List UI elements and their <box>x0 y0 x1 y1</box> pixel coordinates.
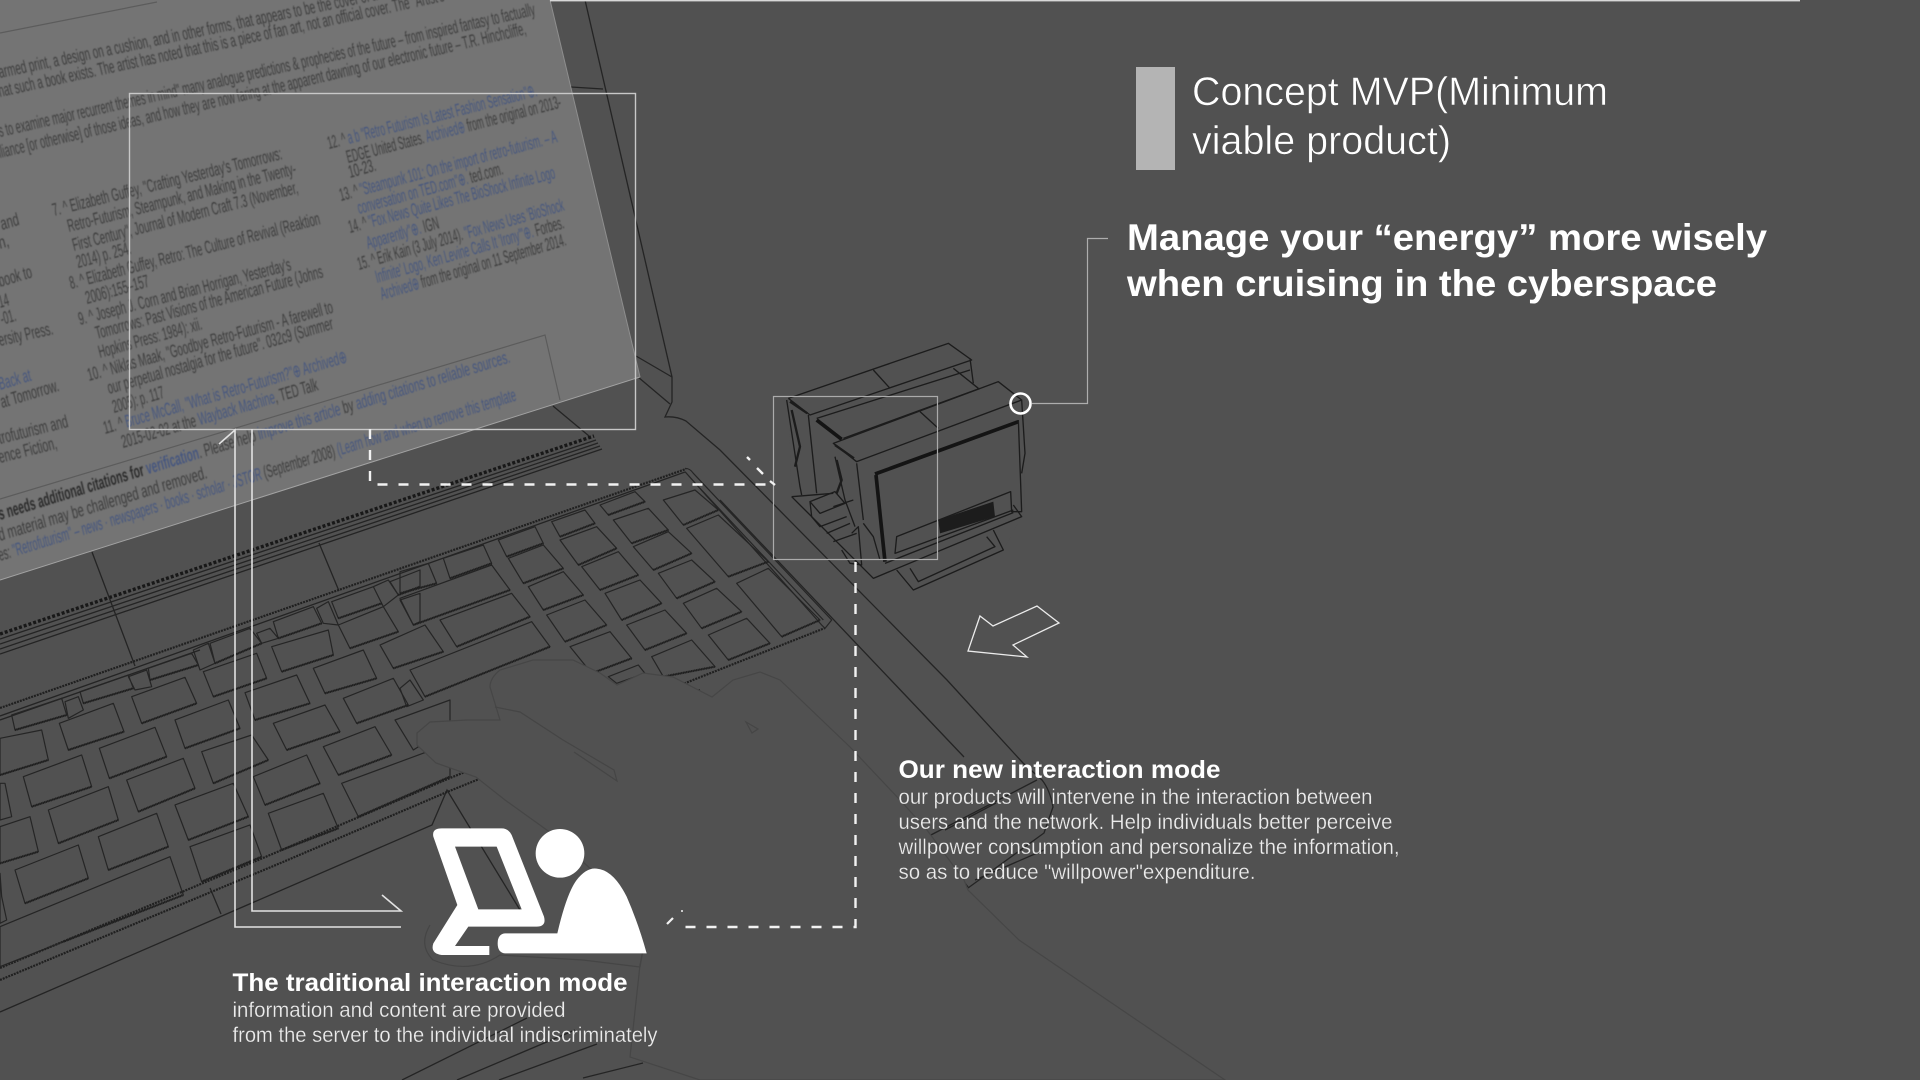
arrow: outline pointing to user <box>968 606 1059 657</box>
headline: when cruising in the cyberspace <box>1126 263 1717 304</box>
text block: traditional interaction mode: The traditional interaction mode <box>232 969 628 997</box>
headline: Manage your “energy” more wisely <box>1127 217 1767 258</box>
screen article text: Tomorrows: Past Visions of the American Future (Johns <box>93 261 325 343</box>
text block: traditional interaction mode: information and content are provided <box>232 999 566 1022</box>
screen article text: Archived⊕ from the original on 11 September 2014. <box>378 229 568 304</box>
text block: traditional interaction mode: from the server to the individual indiscriminately <box>232 1024 658 1047</box>
text block: new interaction mode: Our new interaction mode <box>898 756 1221 784</box>
screen article text: Retro-Futurism, Steampunk, and Making in the Twenty- <box>65 159 298 236</box>
screen article text: at Tomorrow. <box>0 375 61 412</box>
product device <box>787 343 1025 590</box>
screen article text: Hopkins Press: 1984): xii. <box>96 313 204 362</box>
laptop screen <box>0 0 640 580</box>
screen article text: our perpetual nostalgia for the future". 032c9 (Summer <box>105 313 335 398</box>
screen article text: 7. ^ Elizabeth Guffey, "Crafting Yesterday's Tomorrows: <box>50 144 284 220</box>
frame: screen focus rectangle <box>130 94 636 430</box>
callout connector <box>1010 238 1108 414</box>
arrow: dashed product to user <box>667 562 856 927</box>
screen article text: 8. ^ Elizabeth Guffey, Retro: The Culture of Revival (Reaktion <box>67 208 322 293</box>
screen article text: First Century", Journal of Modern Craft 7.3 (November, <box>70 177 300 255</box>
top edge line <box>550 0 1800 1</box>
headline <box>1126 217 1767 304</box>
screen article text: 2006):155–157 <box>83 271 151 308</box>
screen article text <box>0 0 568 565</box>
text block: new interaction mode: so as to reduce "willpower"expenditure. <box>898 861 1256 884</box>
screen article text: 2005): p. 117 <box>110 382 166 417</box>
screen article text: d material may be challenged and removed. <box>0 462 209 545</box>
text block: traditional interaction mode <box>232 969 658 1047</box>
title accent bar <box>1136 67 1175 170</box>
screen article text: es: "Retrofuturism" – news · newspapers · books · scholar · JSTOR (September 2008) (Learn how and when to remove this template <box>0 385 518 565</box>
screen article text: 11. ^ Bruce McCall, "What is Retro-Futurism?"⊕ Archived⊕ <box>101 346 349 438</box>
title <box>1192 70 1608 163</box>
frame: product focus rectangle <box>774 396 938 560</box>
screen article text: EDGE United States. Archived⊕ from the original on 2013- <box>344 92 563 167</box>
screen article text: 13. ^ "Steampunk 101: On the import of retro-futurism. – A <box>337 126 559 205</box>
icon: person at computer <box>433 828 647 955</box>
screen article text: s needs additional citations for verification. Please help improve this article by adding citations to reliable sources. <box>0 346 512 524</box>
title: viable product) <box>1192 119 1451 163</box>
screen article text: 10. ^ Niklas Maak, "Goodbye Retro-Futurism - A farewell to <box>85 297 335 385</box>
text block: new interaction mode <box>898 756 1400 884</box>
keyboard keys upper block <box>193 570 420 670</box>
screen article text: 2014) p. 254. <box>74 238 133 272</box>
arrow: dashed screen to product <box>370 429 775 485</box>
keyboard frame right corner <box>685 468 832 628</box>
screen article text: 15. ^ Erik Kain (3 July 2014). "Fox News Uses 'BioShock <box>355 194 566 274</box>
screen article text: conversation on TED.com"⊕. ted.com. <box>355 158 505 218</box>
title: Concept MVP(Minimum <box>1192 70 1608 114</box>
text block: new interaction mode: willpower consumption and personalize the information, <box>898 836 1400 859</box>
keyboard keys left block <box>0 625 450 967</box>
screen article text: 12. ^ a b "Retro Futurism Is Latest Fashion Sensation"⊕. <box>325 81 539 153</box>
screen article text: Infinite' Logo, Ken Levine Calls It 'Irony'"⊕. Forbes. <box>373 212 566 287</box>
laptop line drawing <box>0 0 1053 1080</box>
text block: new interaction mode: our products will intervene in the interaction between <box>898 786 1372 809</box>
arrow: outer line from screen to user <box>219 430 401 927</box>
keyboard keys right block <box>400 490 820 707</box>
screen article text: 2015-02-02 at the Wayback Machine, TED Talk <box>119 374 320 452</box>
screen article text: Apparently"⊕. IGN <box>364 212 441 253</box>
hand silhouette <box>417 660 1225 1080</box>
screen article text: 9. ^ Joseph J. Corn and Brian Horrigan, Yesterday's <box>76 254 293 329</box>
text block: new interaction mode: users and the network. Help individuals better perceive <box>898 811 1392 834</box>
screen article text: 14. ^ "Fox News Quite Likes The BioShock Infinite Logo <box>346 162 557 237</box>
arrow: inner line from screen to user <box>252 429 401 911</box>
screen article text: 10-23. <box>346 155 378 182</box>
